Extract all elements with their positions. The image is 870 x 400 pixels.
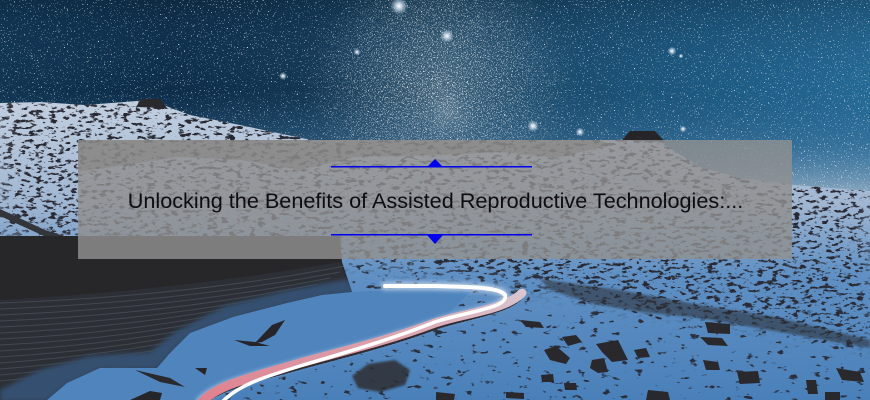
background photo: snow bank below dam	[47, 290, 470, 400]
dark rock band	[540, 279, 870, 348]
top divider with triangle	[331, 159, 532, 168]
large rock blobs	[436, 320, 864, 400]
bright stars	[279, 0, 686, 136]
background photo: light trail road	[200, 286, 524, 400]
background photo: shrub by road	[352, 360, 410, 392]
translucent title panel	[78, 140, 792, 259]
background photo: snowy hills	[0, 90, 870, 400]
title: Unlocking the Benefits of Assisted Reproductive Technologies:...	[128, 188, 743, 213]
bottom divider with triangle	[331, 234, 532, 244]
background photo: diagonal guard rail	[0, 209, 64, 236]
background photo: starry sky	[0, 0, 870, 191]
background photo: dam wall	[0, 236, 360, 400]
